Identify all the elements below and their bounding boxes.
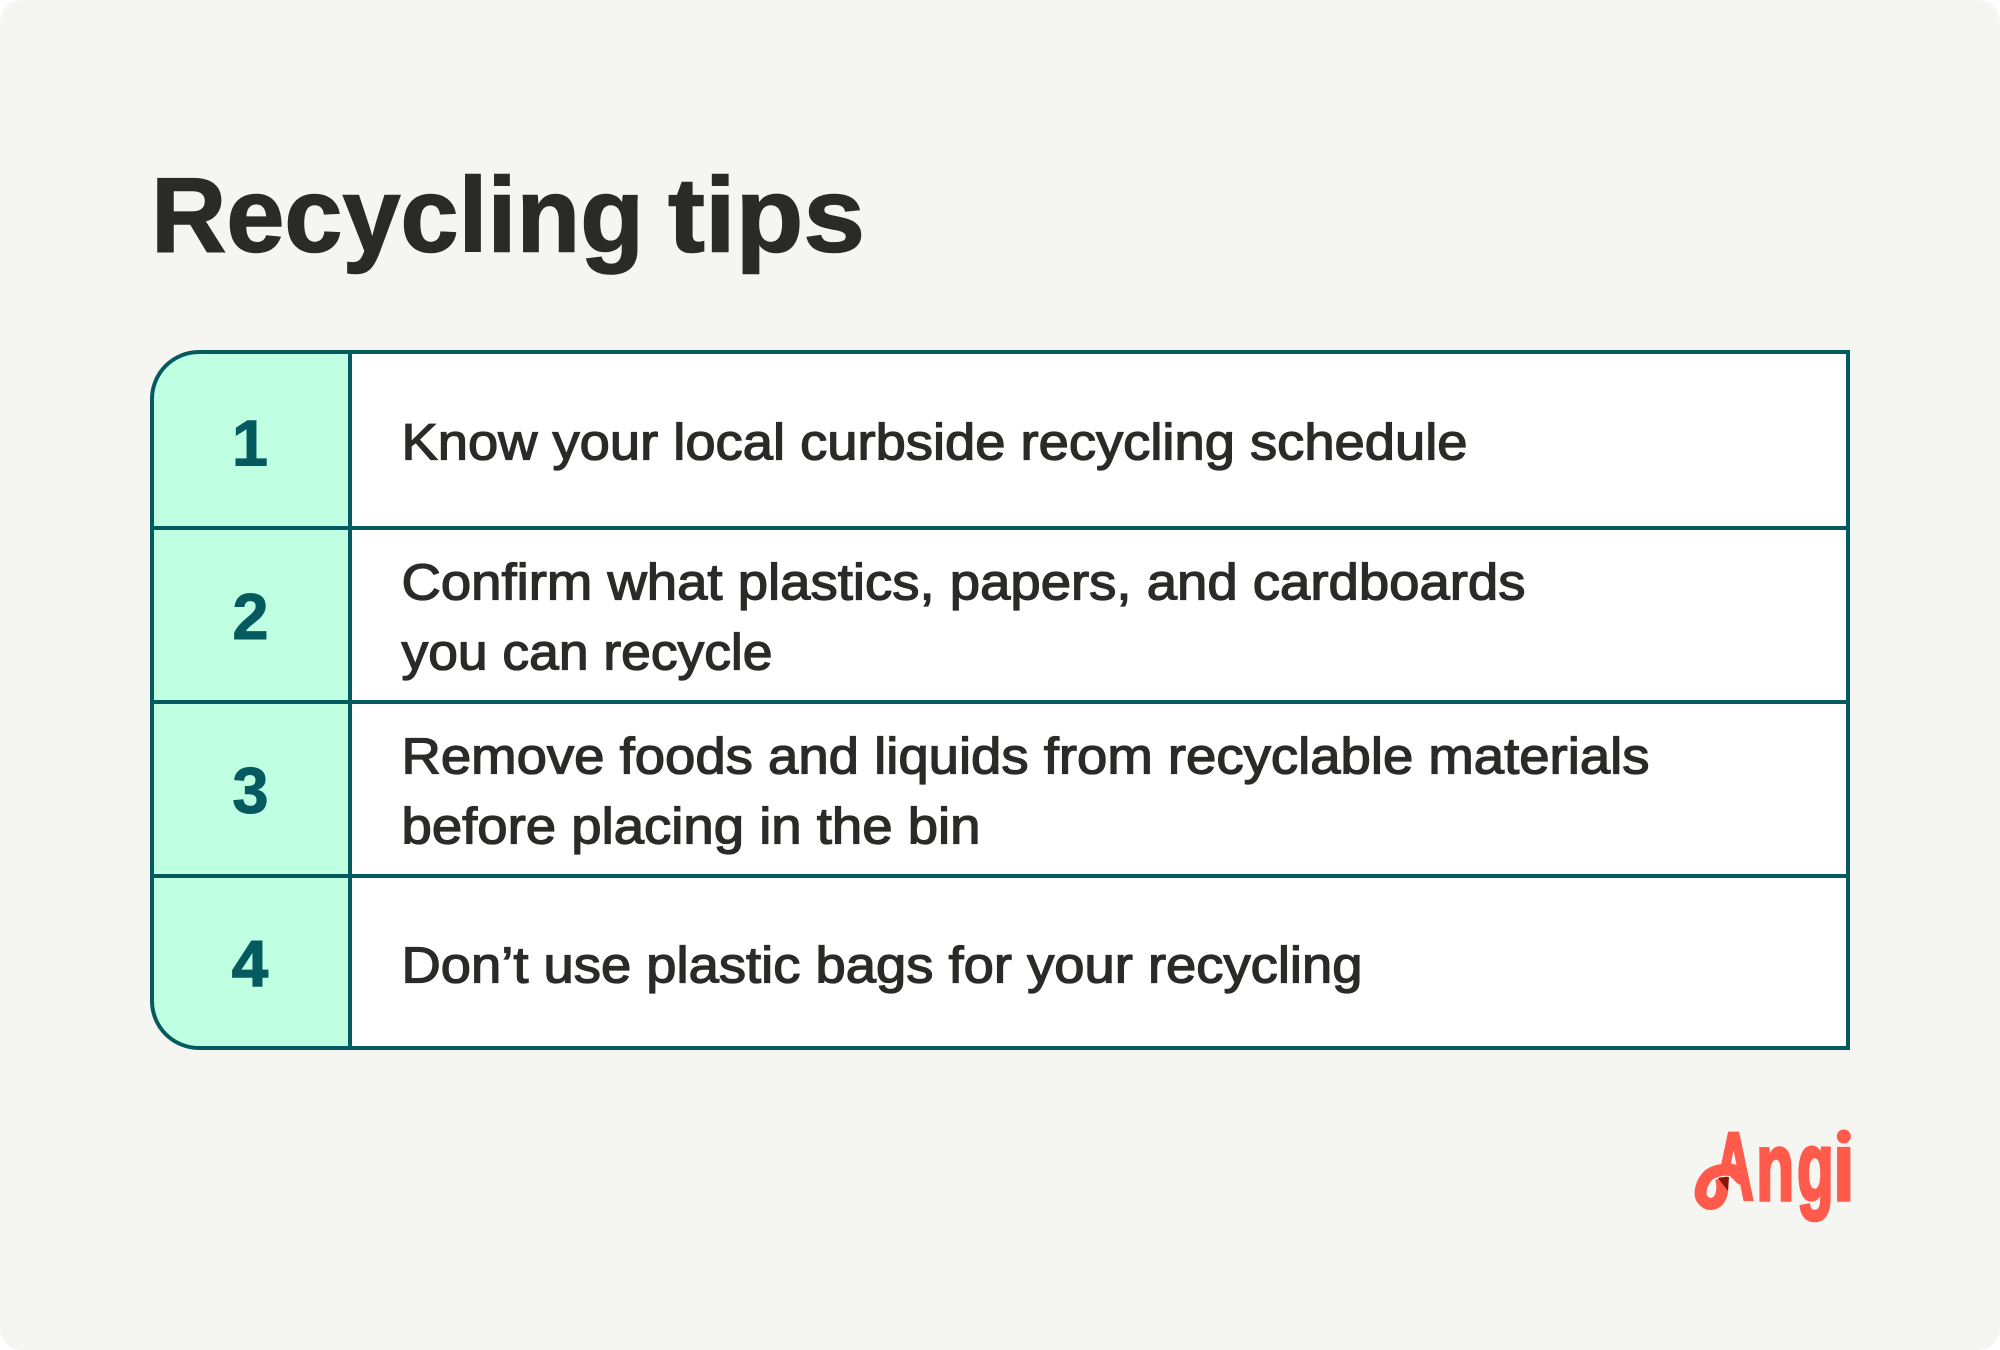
number 3: 3: [232, 754, 269, 827]
title: Recycling: [151, 156, 644, 274]
logo i dot: [1837, 1130, 1851, 1144]
logo letters ngi: n: [1756, 1113, 1794, 1221]
number 2: 2: [232, 580, 269, 653]
table white body: [350, 352, 1848, 1048]
row 3: tip: [232, 728, 1649, 854]
tip 3 text: before placing in the bin: [402, 798, 980, 854]
number 1: 1: [232, 406, 268, 480]
number 4: 4: [232, 927, 268, 1000]
row 2: tip: [232, 554, 1526, 680]
logo loop shadow: [1718, 1177, 1729, 1191]
logo loop swash: [1701, 1170, 1737, 1204]
number column background: [152, 352, 350, 1048]
tip 2 text: you can recycle: [402, 624, 772, 680]
row 1: tip: [232, 406, 1468, 480]
tip 1 text: Know your local curbside recycling schedule: [402, 414, 1468, 470]
logo: Angi: [1694, 1130, 1851, 1222]
logo letters ngi: [1759, 1146, 1850, 1222]
row 4: tip: [232, 927, 1362, 1000]
tip 2 text: [402, 554, 1526, 680]
title: tips: [668, 156, 865, 274]
tip 2 text: Confirm what plastics, papers, and cardboards: [402, 554, 1526, 610]
logo letters ngi: g: [1797, 1113, 1834, 1222]
panel: tips table: [152, 352, 1848, 1048]
tip 3 text: [402, 728, 1649, 854]
table outline and row dividers: [152, 352, 1848, 1048]
tip 3 text: Remove foods and liquids from recyclable materials: [402, 728, 1649, 784]
logo letter A: A: [1714, 1113, 1754, 1220]
logo letters ngi: i: [1833, 1112, 1855, 1221]
tip 4 text: Don’t use plastic bags for your recycling: [402, 936, 1362, 994]
